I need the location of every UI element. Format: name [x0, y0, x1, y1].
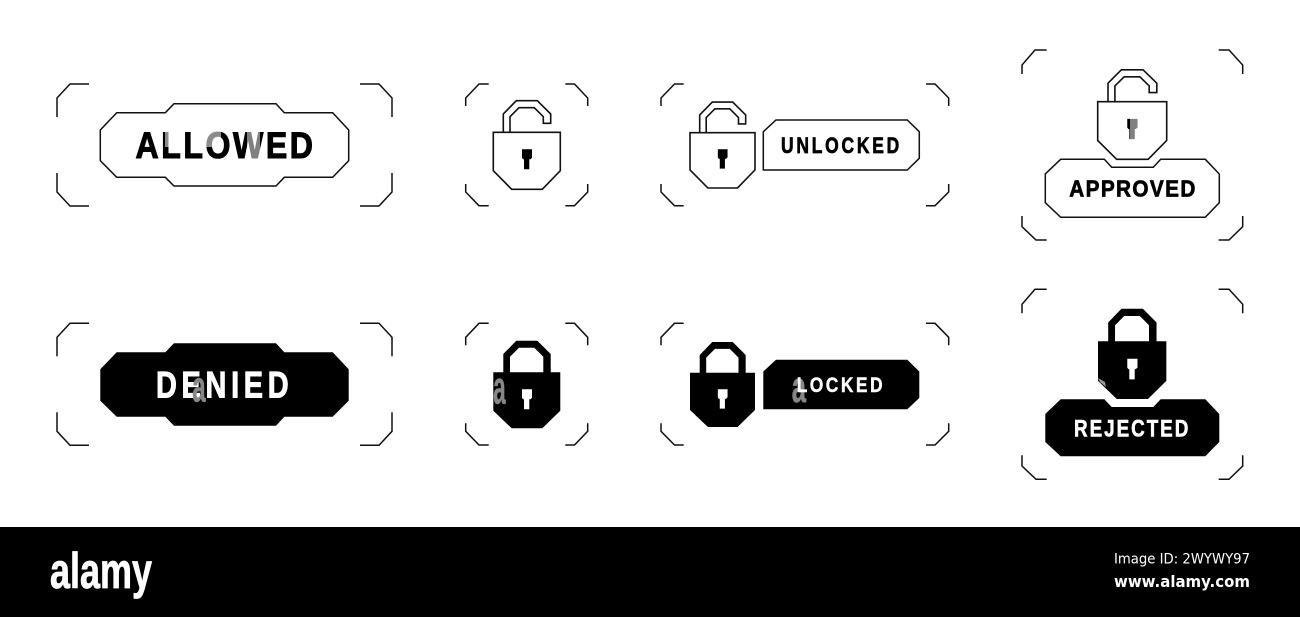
panel: unlocked badge with padlock	[661, 84, 949, 206]
corner brackets: locked	[661, 323, 949, 445]
badge outline: allowed	[100, 104, 349, 186]
badge: rejected	[1045, 399, 1219, 456]
footer bar	[0, 527, 1300, 617]
corner brackets: approved	[1022, 50, 1243, 240]
icon: closed padlock small	[690, 342, 755, 427]
panel: rejected badge with padlock	[1022, 289, 1243, 479]
icon: open padlock large	[1098, 70, 1167, 159]
label: approved: APPROVED	[1069, 176, 1197, 202]
footer url: www.alamy.com	[1114, 572, 1250, 591]
corner brackets: allowed	[57, 84, 392, 206]
panel: denied badge	[57, 323, 392, 445]
label: allowed: ALLOWED	[136, 124, 316, 166]
corner brackets: denied	[57, 323, 392, 445]
corner brackets: rejected	[1022, 289, 1243, 479]
badge outline: approved	[1045, 159, 1219, 217]
corner brackets: unlocked	[661, 84, 949, 206]
label: rejected: REJECTED	[1074, 416, 1190, 442]
badge: denied	[100, 343, 349, 426]
panel: approved badge with padlock	[1022, 50, 1243, 240]
footer image id: Image ID: 2WYWY97	[1114, 551, 1250, 567]
footer logo: alamy	[50, 543, 152, 599]
panel: locked badge with padlock	[661, 323, 949, 445]
corner brackets: open padlock	[466, 84, 588, 206]
label: locked: LOCKED	[797, 373, 885, 397]
corner brackets: closed padlock	[466, 323, 588, 445]
label: denied: DENIED	[156, 364, 293, 405]
watermark letter: locked: a	[792, 363, 806, 412]
icon: closed padlock	[493, 341, 560, 428]
panel: closed padlock: a	[493, 361, 506, 413]
icon: open padlock	[493, 101, 560, 189]
icon: open padlock small	[690, 102, 755, 188]
panel: open padlock	[466, 84, 588, 206]
watermark letter: denied: a	[192, 363, 206, 412]
label: unlocked: UNLOCKED	[781, 133, 902, 158]
panel: allowed badge	[57, 84, 392, 206]
icon: closed padlock large	[1098, 309, 1166, 399]
badge: locked	[763, 360, 919, 409]
badge outline: unlocked	[763, 120, 919, 170]
panel: closed padlock	[466, 323, 588, 445]
